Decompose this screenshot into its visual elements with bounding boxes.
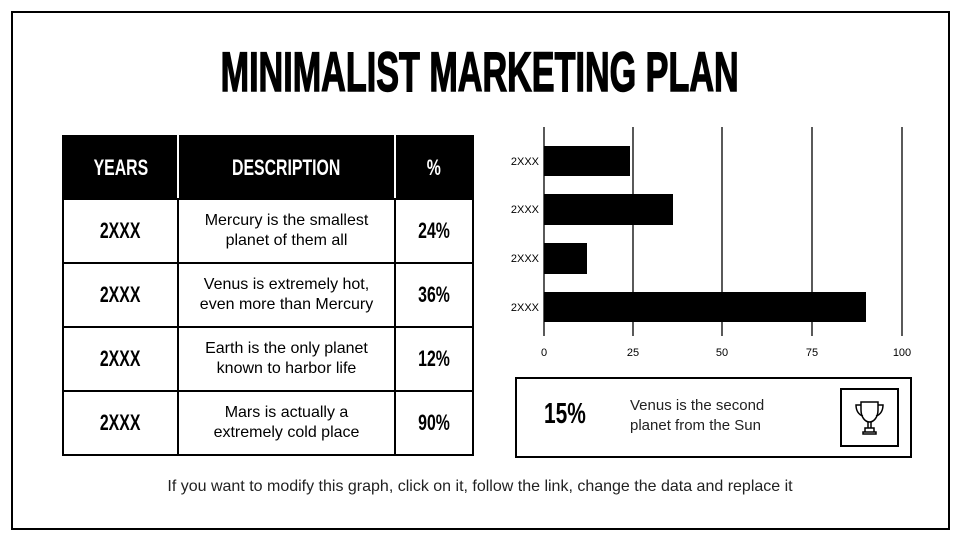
bar chart: 50 xyxy=(716,347,728,359)
bar chart: 75 xyxy=(806,347,818,359)
table xyxy=(62,135,474,456)
callout value: 15% xyxy=(544,398,586,430)
row 1: planet of them all xyxy=(226,232,347,249)
row 3: 2XXX xyxy=(100,346,141,371)
title: MINIMALIST MARKETING PLAN xyxy=(221,40,739,103)
row 2: 36% xyxy=(418,282,450,307)
callout text: planet from the Sun xyxy=(630,417,761,434)
row 4: Mars is actually a xyxy=(225,404,348,421)
table header: % xyxy=(427,154,441,180)
bar chart: 0 xyxy=(541,347,547,359)
row 2 xyxy=(100,276,450,313)
bar chart: 2XXX xyxy=(511,302,540,314)
table header: DESCRIPTION xyxy=(232,154,341,180)
bar chart: 2XXX xyxy=(511,253,540,265)
footer note: If you want to modify this graph, click on it, follow the link, change the data and replace it xyxy=(167,478,793,495)
row 1 xyxy=(100,212,450,249)
row 2: even more than Mercury xyxy=(200,296,373,313)
bar chart: 25 xyxy=(627,347,639,359)
callout xyxy=(515,377,912,458)
row 1: 24% xyxy=(418,218,450,243)
table header xyxy=(64,137,472,441)
row 1: Mercury is the smallest xyxy=(205,212,368,229)
icon: trophy xyxy=(840,388,899,447)
row 3: Earth is the only planet xyxy=(205,340,368,357)
row 4 xyxy=(100,404,450,441)
table header: YEARS xyxy=(93,154,148,180)
row 3: known to harbor life xyxy=(217,360,356,377)
callout text xyxy=(630,397,764,434)
row 1: 2XXX xyxy=(100,218,141,243)
row 4: 2XXX xyxy=(100,410,141,435)
bar chart: 2XXX xyxy=(511,156,540,168)
bar chart: 100 xyxy=(893,347,911,359)
row 2: Venus is extremely hot, xyxy=(204,276,369,293)
row 4: extremely cold place xyxy=(214,424,359,441)
row 4: 90% xyxy=(418,410,450,435)
row 3 xyxy=(100,340,450,377)
row 2: 2XXX xyxy=(100,282,141,307)
callout text: Venus is the second xyxy=(630,397,764,414)
bar chart xyxy=(511,127,911,359)
bar chart: 2XXX xyxy=(511,204,540,216)
row 3: 12% xyxy=(418,346,450,371)
